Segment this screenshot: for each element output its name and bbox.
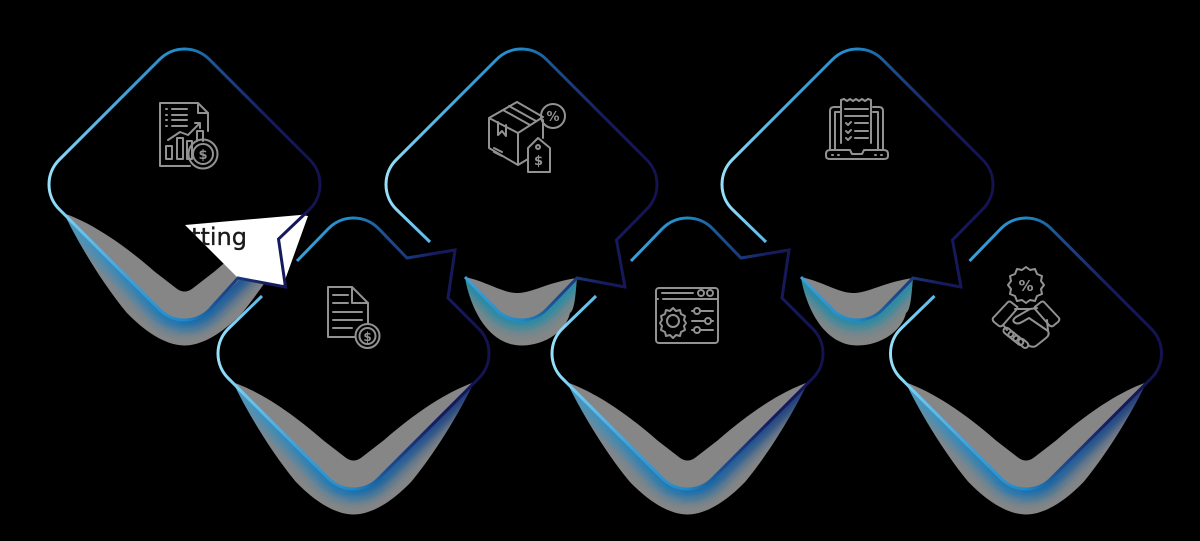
icon: settings window with gear and sliders xyxy=(656,288,718,343)
diamond outline 5 xyxy=(552,218,823,489)
crescent shadow: diamond 2 xyxy=(232,382,476,514)
icon: box with price tag and percent xyxy=(489,102,565,172)
diamond outline 6 xyxy=(890,218,1162,489)
black mask: diamond 2 interior xyxy=(218,218,489,489)
icon: invoice document with coin: $ xyxy=(363,330,372,344)
icon: handshake with percent badge: % xyxy=(1018,277,1034,295)
torn white label with partial text: tting xyxy=(191,223,247,251)
icon: handshake with percent badge xyxy=(993,267,1059,349)
diamond outline 4 xyxy=(722,49,993,320)
diamond outline 3 xyxy=(386,49,657,320)
icon: invoice document with coin xyxy=(328,287,380,348)
diamond outline 1 xyxy=(49,49,320,320)
black mask: diamond 5 interior xyxy=(552,218,823,489)
crescent shadow: diamond 5 xyxy=(566,382,810,514)
icon: laptop with checklist receipt xyxy=(826,99,888,159)
icon: box with price tag and percent: % xyxy=(546,110,560,125)
icon: financial report with chart and coin: $ xyxy=(198,148,208,163)
torn white label with partial text xyxy=(185,215,308,286)
diamond outline 2 xyxy=(218,218,489,489)
icon: financial report with chart and coin xyxy=(160,103,218,168)
crescent shadow: diamond 1 xyxy=(62,212,306,346)
crescent shadow: diamond 4 xyxy=(798,274,918,346)
black mask: diamond 6 interior xyxy=(890,218,1162,489)
crescent shadow: diamond 3 xyxy=(462,274,582,346)
crescent shadow: diamond 6 xyxy=(904,382,1148,514)
icon: box with price tag and percent: $ xyxy=(534,154,543,169)
